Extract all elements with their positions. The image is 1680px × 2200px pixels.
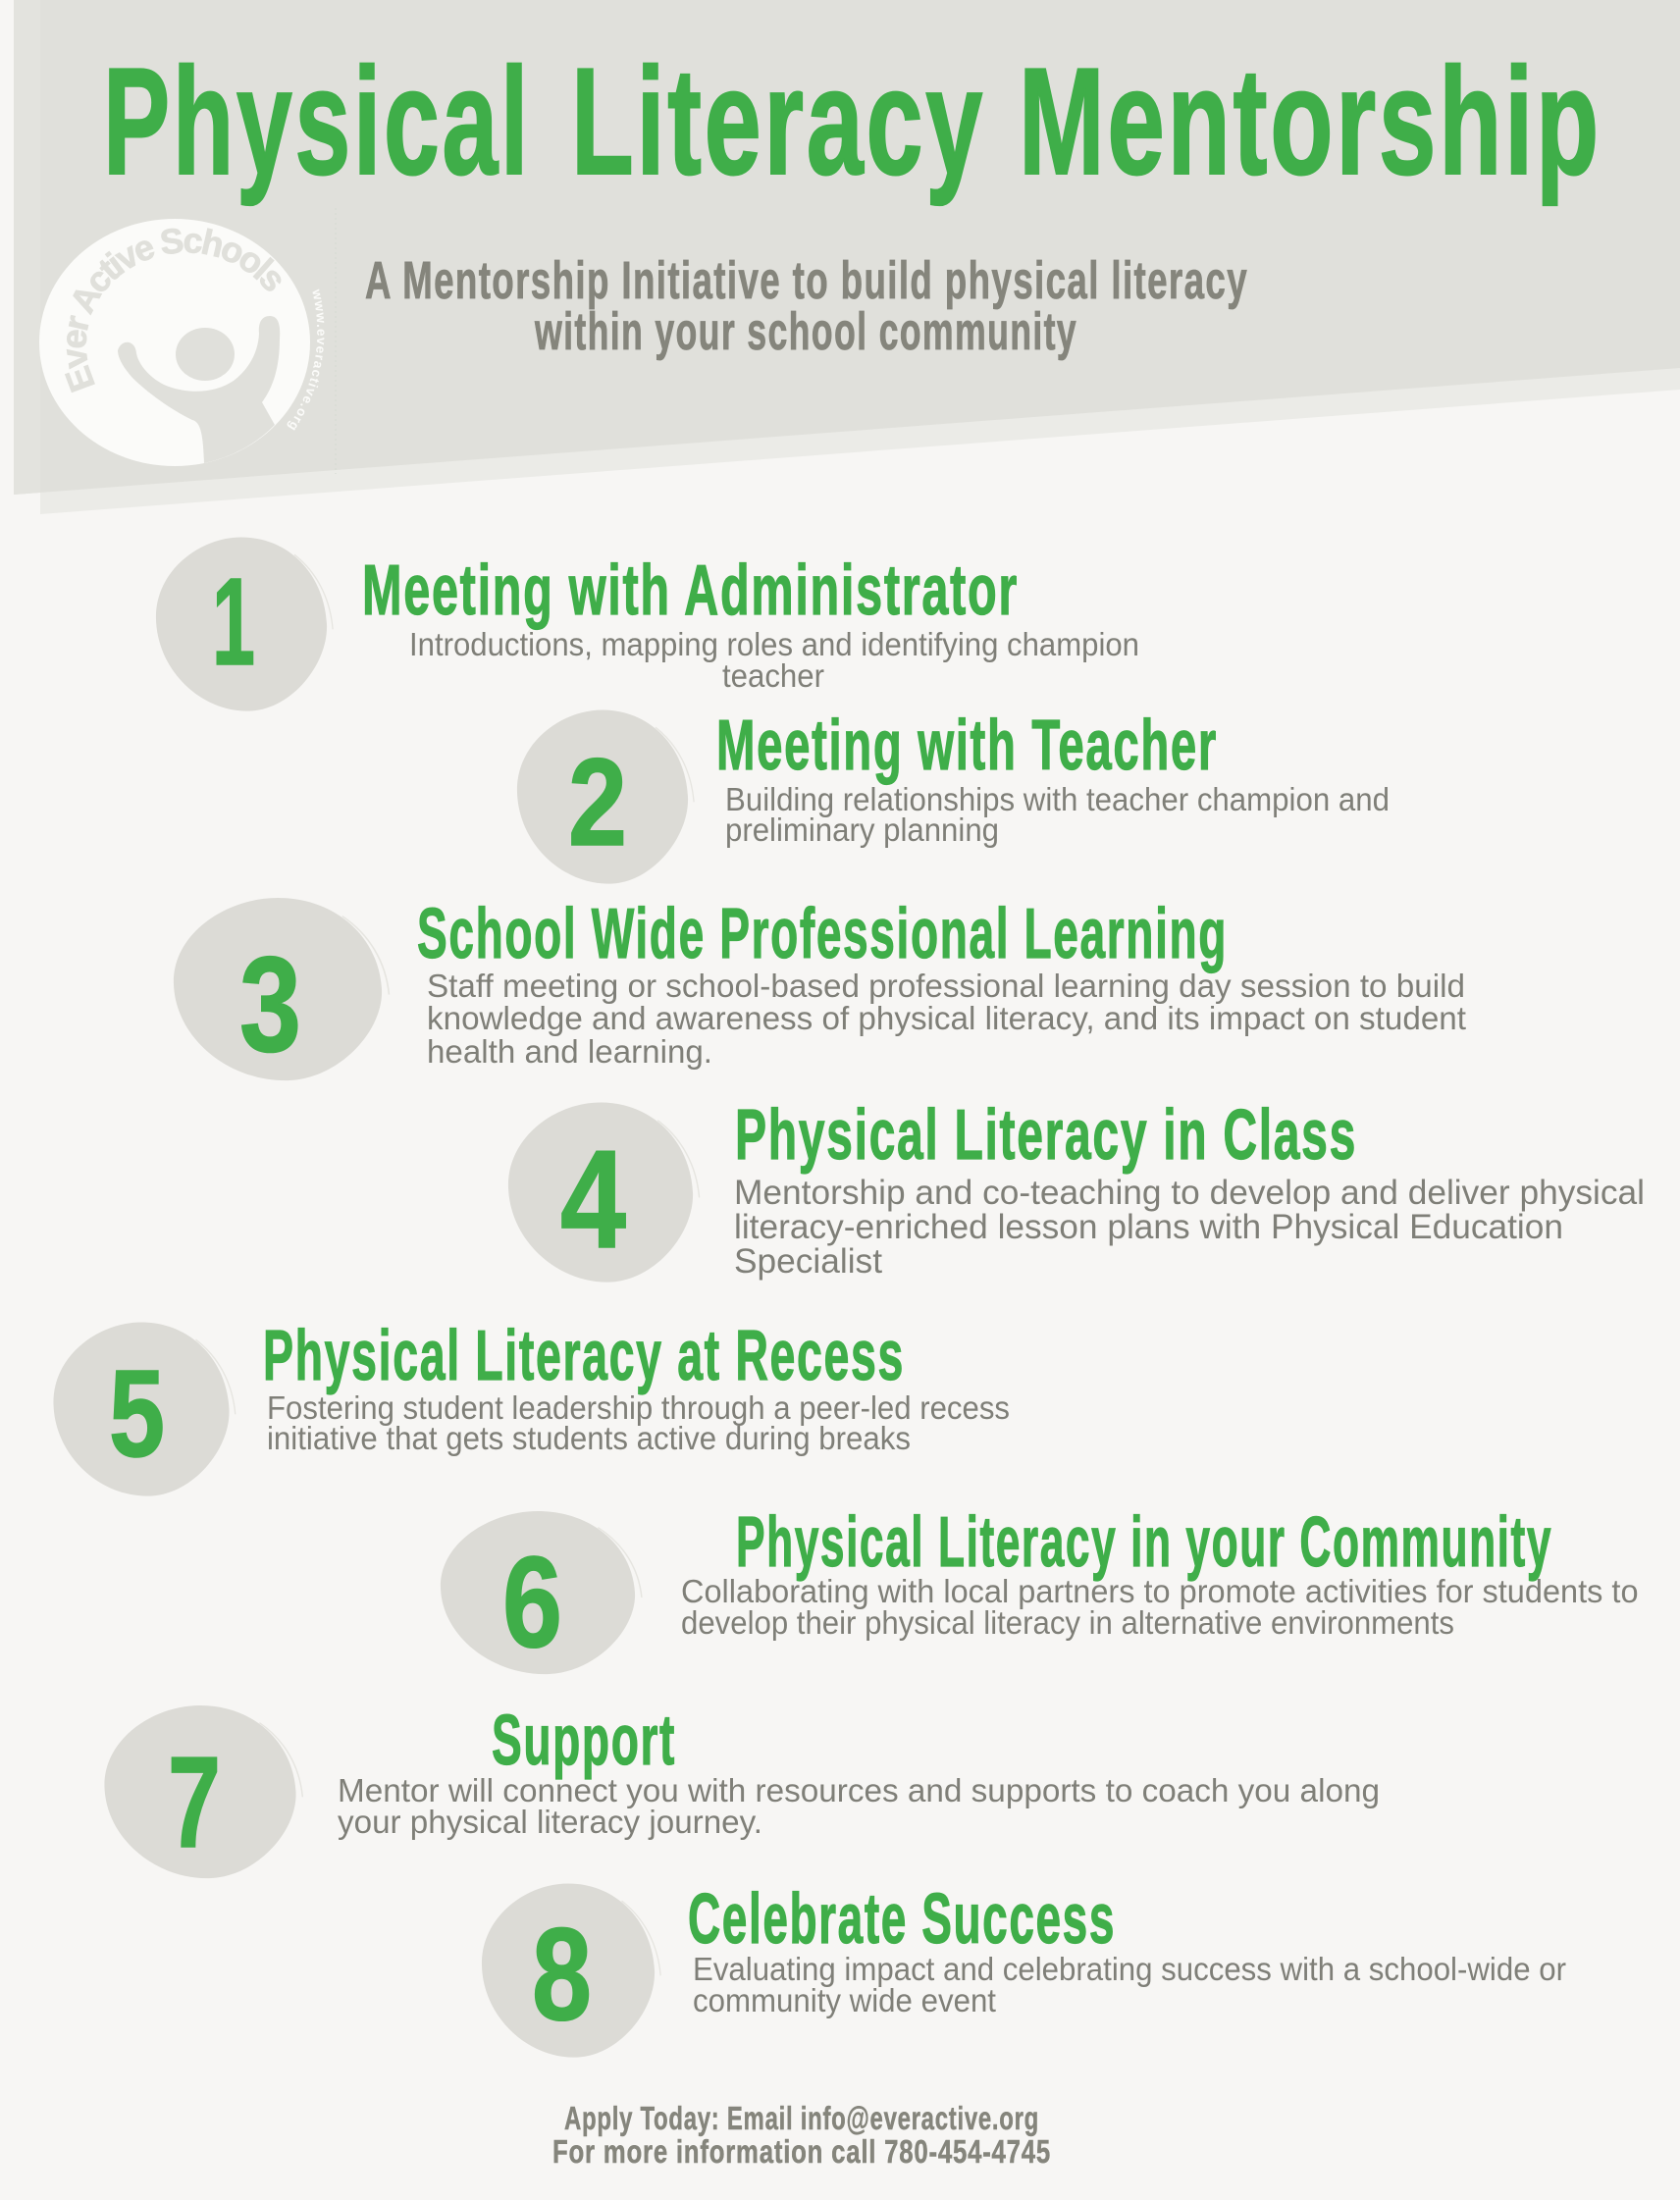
heading 4: Physical Literacy in Class	[735, 1096, 1357, 1175]
description 3: Staff meeting or school-based professional learning day session to build	[427, 968, 1465, 1004]
description 5: Fostering student leadership through a peer-led recess	[267, 1389, 1010, 1426]
description 4: literacy-enriched lesson plans with Physical Education	[734, 1208, 1563, 1246]
number 6: 6	[502, 1530, 562, 1674]
step 7	[104, 1702, 1380, 1878]
step 3	[174, 895, 1466, 1080]
step 6	[441, 1503, 1639, 1674]
description 4: Specialist	[734, 1242, 882, 1281]
description 7: your physical literacy journey.	[338, 1804, 762, 1840]
description 1	[409, 626, 1139, 694]
description 2: preliminary planning	[725, 812, 999, 848]
description 6: develop their physical literacy in alternative environments	[681, 1604, 1454, 1641]
subtitle: A Mentorship Initiative to build physical literacy	[365, 251, 1248, 310]
step 4	[508, 1096, 1645, 1283]
step 1	[156, 538, 1139, 711]
number 4: 4	[560, 1122, 626, 1278]
description 3: knowledge and awareness of physical literacy, and its impact on student	[427, 1000, 1466, 1036]
title: Literacy	[571, 36, 985, 206]
description 8	[693, 1951, 1566, 2018]
badge 1	[156, 538, 333, 711]
description 5	[267, 1389, 1010, 1456]
heading 7: Support	[492, 1702, 676, 1780]
logo: Ever Active Schools	[39, 219, 324, 466]
footer contact	[552, 2100, 1051, 2170]
footer contact: For more information call 780-454-4745	[552, 2133, 1051, 2170]
heading 2: Meeting with Teacher	[716, 707, 1218, 785]
description 5: initiative that gets students active during breaks	[267, 1420, 911, 1456]
heading 3: School Wide Professional Learning	[417, 895, 1228, 973]
subtitle: within your school community	[534, 302, 1077, 361]
step 8	[482, 1880, 1566, 2058]
heading 5: Physical Literacy at Recess	[263, 1317, 905, 1395]
description 4: Mentorship and co-teaching to develop and deliver physical	[734, 1174, 1645, 1212]
subtitle	[365, 251, 1248, 361]
heading 1: Meeting with Administrator	[362, 551, 1019, 630]
badge 8	[482, 1884, 660, 2058]
footer contact: Apply Today: Email info@everactive.org	[564, 2100, 1039, 2136]
number 2: 2	[568, 733, 627, 871]
description 3	[427, 968, 1466, 1070]
description 6	[681, 1573, 1639, 1641]
badge 7	[104, 1705, 302, 1878]
badge 4	[508, 1103, 700, 1283]
badge 6	[441, 1511, 642, 1674]
logo name: Ever Active Schools	[65, 228, 281, 393]
number 7: 7	[168, 1730, 221, 1874]
description 2: Building relationships with teacher champion and	[725, 781, 1390, 817]
description 1: teacher	[722, 657, 824, 694]
header banner	[14, 0, 1680, 514]
number 5: 5	[109, 1344, 165, 1483]
step 5	[53, 1317, 1010, 1496]
title	[103, 36, 1601, 206]
number 3: 3	[239, 929, 301, 1080]
step 2	[517, 707, 1390, 884]
description 8: Evaluating impact and celebrating success with a school-wide or	[693, 1951, 1566, 1987]
description 1: Introductions, mapping roles and identifying champion	[409, 626, 1139, 662]
description 2	[725, 781, 1390, 848]
description 7	[338, 1772, 1380, 1840]
logo url: www.everactive.org	[287, 288, 324, 430]
badge 3	[174, 898, 389, 1080]
badge 5	[53, 1323, 236, 1496]
description 6: Collaborating with local partners to promote activities for students to	[681, 1573, 1639, 1609]
description 7: Mentor will connect you with resources and supports to coach you along	[338, 1772, 1380, 1808]
number 1: 1	[212, 552, 255, 691]
description 8: community wide event	[693, 1982, 996, 2018]
description 4	[734, 1174, 1645, 1281]
badge 2	[517, 710, 694, 884]
number 8: 8	[532, 1902, 592, 2048]
title: Physical	[103, 36, 531, 206]
heading 8: Celebrate Success	[688, 1880, 1116, 1959]
description 3: health and learning.	[427, 1033, 712, 1070]
logo figure	[118, 316, 280, 463]
